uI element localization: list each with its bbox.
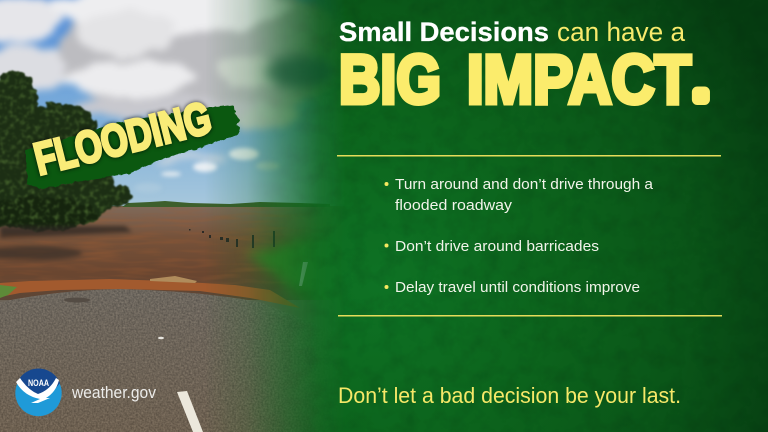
grass bank	[245, 235, 345, 320]
brush label: FLOODING	[25, 92, 240, 189]
logo bird	[16, 378, 59, 403]
bullet list	[384, 176, 654, 296]
headline	[339, 41, 708, 118]
closing message: Don’t let a bad decision be your last.	[338, 383, 681, 408]
NOAA logo	[15, 369, 62, 416]
background: green panel fade	[200, 0, 768, 432]
website: weather.gov	[71, 383, 156, 402]
road surface	[0, 289, 400, 432]
panel colour	[200, 0, 768, 432]
panel texture	[304, 8, 571, 424]
logo wordmark: NOAA	[28, 378, 49, 388]
headline: .	[694, 54, 708, 110]
sky	[0, 0, 400, 208]
top divider	[337, 155, 721, 156]
heading line	[339, 17, 686, 47]
bullet 3: Delay travel until conditions improve	[395, 279, 640, 296]
brush stroke	[25, 105, 240, 189]
bullet 2: Don’t drive around barricades	[395, 238, 599, 255]
dark water reflection	[0, 246, 82, 260]
road underlay	[0, 300, 400, 432]
debris	[150, 276, 197, 283]
clouds	[0, 0, 350, 164]
logo dark half	[17, 369, 60, 398]
bullet 1: Turn around and don’t drive through a	[395, 176, 654, 193]
bullet 1	[384, 176, 654, 214]
heading line: Small Decisions	[339, 17, 549, 47]
road centre line	[177, 391, 203, 432]
logo light half	[15, 370, 62, 416]
photo: flooded road	[0, 0, 335, 432]
marker post	[299, 262, 308, 286]
waterline under tree	[0, 226, 132, 238]
bullet 1: flooded roadway	[395, 197, 513, 214]
heading line: can have a	[557, 17, 686, 47]
road smudge and mark	[64, 298, 90, 302]
headline: BIG	[339, 41, 441, 118]
fence posts	[189, 229, 275, 248]
red dirt edge	[0, 279, 300, 308]
small clouds near horizon	[134, 148, 280, 193]
horizon treeline	[122, 201, 330, 207]
tree	[0, 70, 131, 231]
grass patch left	[0, 285, 17, 298]
dark smudge in fade	[266, 56, 334, 88]
water	[0, 206, 400, 310]
label text: FLOODING	[29, 92, 216, 185]
headline: IMPACT	[467, 41, 691, 118]
bottom divider	[338, 315, 722, 316]
